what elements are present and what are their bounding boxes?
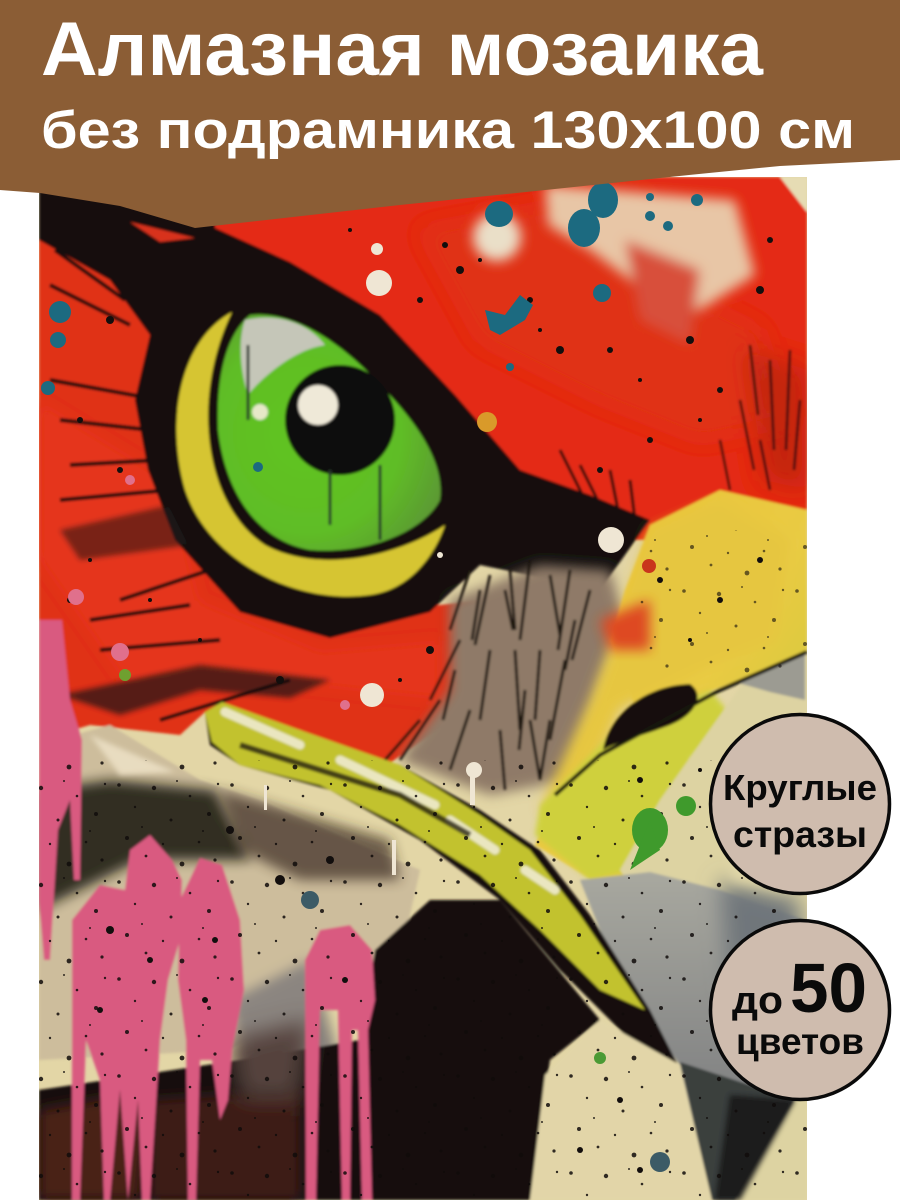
dark splatter: [67, 228, 773, 1173]
badge: round rhinestones: стразы: [733, 814, 867, 855]
badge: up to 50 colours: цветов: [736, 1021, 864, 1062]
badge: round rhinestones: [710, 714, 890, 894]
black lower feathers: [39, 900, 600, 1200]
iris grey reflection: [241, 318, 325, 395]
lower cream feathers left: [39, 725, 420, 1080]
red forehead plumage: [170, 177, 807, 540]
bottom right cream: [530, 1020, 712, 1200]
drip group 1: [72, 835, 182, 1200]
yellow eyelid crescent: [176, 312, 445, 597]
black brow and eye surround: [39, 177, 650, 720]
white splatter: [264, 243, 624, 875]
teal splatter: [41, 182, 703, 1172]
pupil: [285, 365, 395, 475]
pink and green splatter: [68, 412, 696, 1064]
beak outline: [555, 652, 807, 795]
fine speckle on yellow beak: [640, 530, 807, 680]
badge: up to 50 colours: 50: [790, 949, 867, 1027]
drip group 2: [178, 858, 244, 1200]
drip left edge: [39, 620, 82, 960]
green iris: [218, 314, 441, 551]
gray beak and cream paint: [580, 652, 807, 1200]
badge: round rhinestones: Круглые: [723, 767, 877, 808]
top banner: [0, 0, 900, 228]
badge: up to 50 colours: до: [732, 980, 783, 1022]
badge: up to 50 colours: [710, 920, 890, 1100]
left red cheek: [39, 225, 480, 770]
top right cream corner: [780, 177, 807, 212]
lower yellow beak: [205, 702, 678, 1065]
cream paint splash top right: [473, 185, 755, 345]
blurred underpainting: [39, 177, 807, 1200]
nostril: [603, 684, 697, 750]
painting: eagle face: [39, 177, 807, 1200]
pink drips: [39, 620, 375, 1200]
subtitle: без подрамника 130х100 см: [41, 101, 855, 160]
upper yellow beak: [535, 490, 807, 885]
fine speckle on lower painting: [39, 760, 807, 1200]
cream feather patch: [400, 565, 625, 795]
highlight: [298, 385, 338, 425]
eye: [176, 312, 445, 597]
title: Алмазная мозаика: [41, 7, 764, 92]
drip group 3: [305, 925, 375, 1200]
feather hatching: [385, 560, 590, 790]
